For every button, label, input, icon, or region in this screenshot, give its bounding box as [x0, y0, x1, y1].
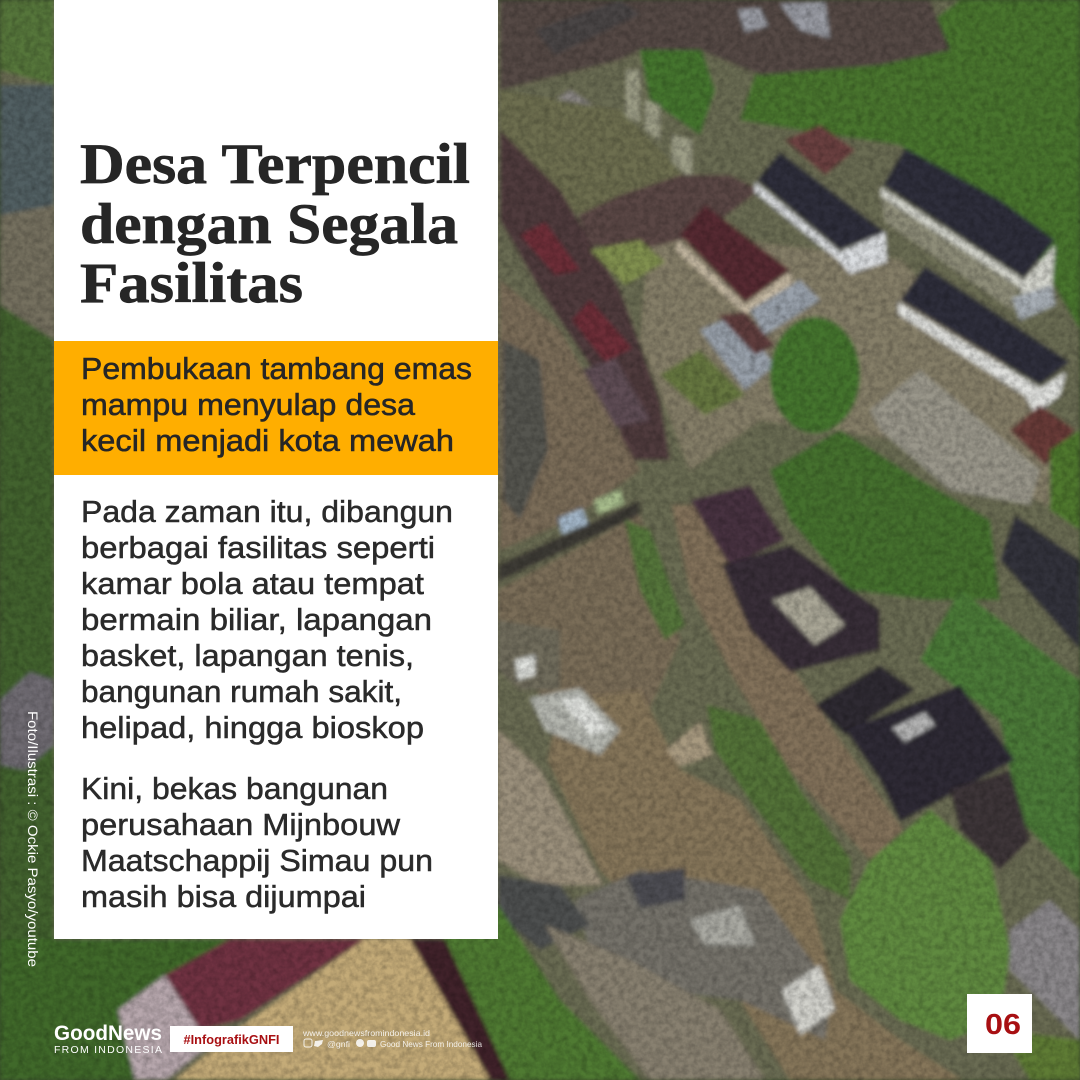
photo: white wall building three [898, 302, 1066, 415]
photo: dark roof building three [900, 266, 1070, 385]
orange subtitle band: kecil menjadi kota mewah [81, 423, 454, 458]
page number box: 06 [985, 1009, 1021, 1041]
photo: white strip and end wall building two [881, 187, 1055, 298]
logo: GoodNews From Indonesia [54, 1022, 162, 1056]
photo: lower gravel bar [545, 925, 765, 1080]
photo: rusty roof right [1010, 405, 1075, 465]
orange subtitle band: mampu menyulap desa [81, 387, 416, 422]
photo: brown grey roof [582, 358, 650, 428]
photo: building wall [676, 240, 795, 314]
title: dengan Segala [80, 193, 458, 256]
photo: pale metal roof bottom [118, 975, 215, 1080]
photo: dirt and brush below settlement [500, 90, 690, 220]
photo: grass band by the road [625, 520, 685, 640]
hashtag label [170, 1026, 293, 1052]
photo: maroon roof middle [690, 485, 785, 566]
photo: white wall building one [755, 182, 887, 274]
photo: river shadow [626, 868, 685, 908]
photo: mid river grey-brown rocky stream [575, 870, 833, 1040]
website and social handles: www.goodnewsfromindonesia.id [302, 1028, 430, 1038]
photo: dark water left [498, 875, 590, 950]
photo: row of red houses along left road [500, 130, 670, 460]
photo: left edge grey building [0, 672, 54, 770]
orange subtitle band [54, 341, 498, 475]
photo: left edge green [0, 305, 54, 1000]
title: Desa Terpencil [80, 133, 470, 196]
title [80, 133, 470, 315]
hashtag label: #InfografikGNFI [184, 1032, 280, 1047]
logo: GoodNews From Indonesia: GoodNews [54, 1022, 162, 1045]
photo: tree cluster top centre [640, 15, 715, 135]
photo: vehicles on bridge [558, 508, 588, 534]
orange subtitle band: Pembukaan tambang emas [81, 351, 472, 386]
body paragraph: facilities: kamar bola atau tempat [81, 566, 424, 601]
body paragraph: facilities: helipad, hingga bioskop [81, 710, 424, 745]
body paragraph: facilities: basket, lapangan tenis, [81, 638, 414, 673]
photo: left edge water [0, 85, 54, 220]
photo: green bushes middle right [770, 430, 1000, 600]
photo: garden plot [660, 350, 745, 415]
body paragraph: facilities: Pada zaman itu, dibangun [81, 494, 453, 529]
photo: white foam rapids [515, 655, 610, 735]
photo: grass patch [590, 240, 665, 285]
page number box [967, 994, 1032, 1053]
photo: green vehicle [594, 490, 624, 514]
photo: river rapids [530, 688, 620, 755]
logo: GoodNews From Indonesia: FROM INDONESIA [54, 1044, 162, 1056]
website and social handles: Good News From Indonesia [380, 1039, 482, 1049]
photo: dark roof building two [883, 148, 1055, 278]
photo: riverbank mud [498, 515, 680, 730]
photo: river water brown [548, 690, 962, 1080]
photo: dark water pool [503, 340, 548, 520]
photo: pillars under building two [881, 196, 1018, 310]
photo: dark roof top left [535, 0, 640, 55]
photo: village ground [640, 230, 1060, 510]
body paragraph: remains today: Maatschappij Simau pun [81, 843, 433, 878]
photo: lower right yard [950, 770, 1030, 870]
white text panel [54, 0, 498, 939]
photo: maroon roof segments [520, 222, 632, 362]
photo: dirt road [672, 505, 903, 860]
photo: dark red roof edge [410, 939, 510, 1080]
photo: bottom right grass [1000, 1030, 1080, 1080]
photo: rusty shed [718, 312, 775, 355]
photo: grass far right upper [1050, 430, 1080, 530]
photo: rusty settlement along the top [500, 0, 950, 90]
photo: bank vegetation [707, 705, 851, 900]
photo: red roof long building [680, 205, 790, 302]
icon: twitter [314, 1040, 323, 1047]
photo: right vegetation [920, 590, 1080, 880]
photo: foam patch mid river [690, 905, 755, 945]
photo: cluster of roofs near centre [578, 175, 760, 250]
photo: forest upper right [740, 0, 1080, 330]
photo: blue grey shed roofs [700, 280, 820, 390]
photo: boulder in river [666, 722, 712, 766]
photo: grey metal roof [772, 587, 845, 645]
icon: youtube [367, 1040, 376, 1047]
photo: gravel bar [498, 730, 603, 885]
photo: tan thatched roof bottom [175, 939, 490, 1080]
photo: bottom right houses [1010, 900, 1080, 1040]
photo: upstream pool [498, 620, 560, 690]
body paragraph: facilities: berbagai fasilitas seperti [81, 530, 435, 565]
title: Fasilitas [80, 252, 303, 315]
photo: grey roofs at the top [738, 2, 830, 38]
photo: dark roof right edge [1000, 515, 1080, 650]
body paragraph: remains today: masih bisa dijumpai [81, 879, 366, 914]
photo: small rusty roofs [535, 90, 600, 140]
photo: concrete yard [870, 370, 1040, 505]
body paragraph: facilities: bermain biliar, lapangan [81, 602, 432, 637]
photo: bare ground left of village [500, 280, 640, 550]
website and social handles: @gnfi [327, 1039, 350, 1049]
icon: instagram [304, 1039, 312, 1047]
photo: shed behind building two [1012, 285, 1055, 320]
photo: left edge top grass [0, 0, 54, 85]
website and social handles [302, 1028, 482, 1049]
photo: patched grey roof [892, 712, 935, 742]
icon: facebook [356, 1039, 364, 1047]
body paragraph: facilities: bangunan rumah sakit, [81, 674, 402, 709]
photo: dark roof building one [757, 152, 885, 250]
photo: green tree centre [770, 317, 860, 433]
photo: white water downstream [782, 965, 835, 1035]
photo: left edge rocks [0, 205, 54, 345]
body paragraph: remains today: perusahaan Mijnbouw [81, 807, 401, 842]
photo: dark roof lower building main [845, 685, 1015, 822]
body paragraph: remains today [81, 771, 433, 914]
photo: rusty roof above building one [785, 125, 855, 175]
photo: lower left bank grass [440, 905, 640, 1080]
body paragraph: facilities [81, 494, 453, 745]
body paragraph: remains today: Kini, bekas bangunan [81, 771, 388, 806]
photo: large bush lower right [840, 810, 1010, 1040]
photo: maroon roof bottom [165, 939, 365, 1030]
photo: bottom left grass [0, 939, 240, 1080]
photo: dark roof complex [722, 545, 880, 672]
photo: dark roof lower building [815, 665, 915, 735]
photo: bridge [498, 500, 640, 582]
photo: concrete ruin pillars [626, 70, 692, 178]
photo credit: Foto/Ilustrasi : © Ockie Pasyo/youtube [25, 711, 41, 967]
